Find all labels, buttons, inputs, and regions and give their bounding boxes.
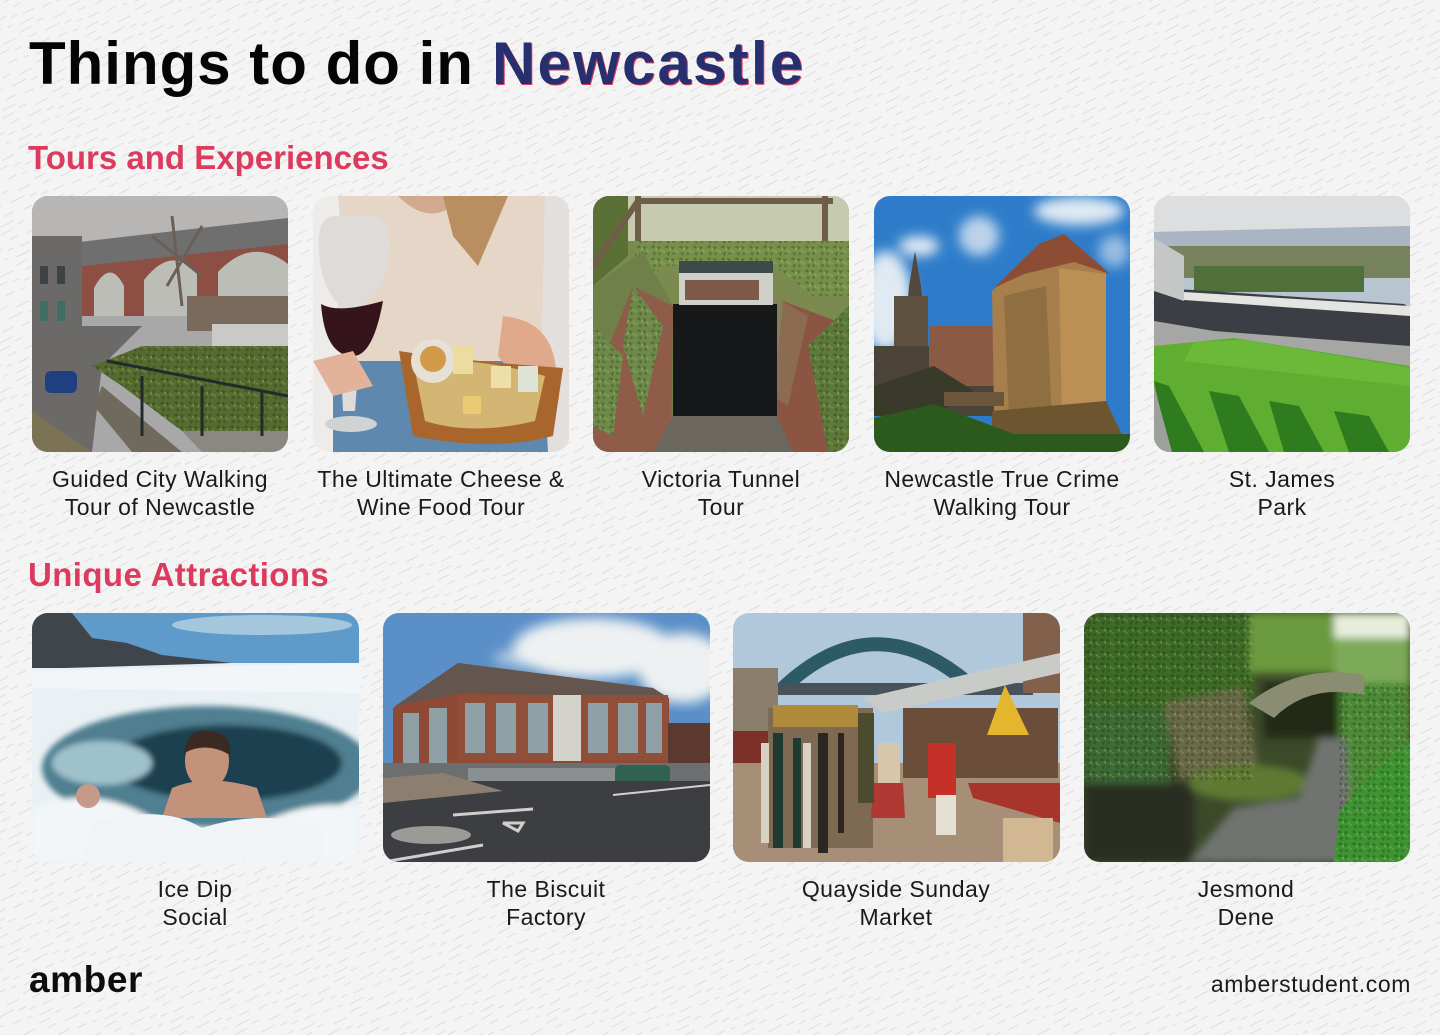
caption: Guided City Walking Tour: Tour of Newcastle bbox=[65, 494, 255, 520]
caption: Jesmond Dene: Dene bbox=[1218, 904, 1274, 930]
caption: Cheese and Wine Food Tour: The Ultimate Cheese & bbox=[317, 466, 565, 492]
caption: Quayside Sunday Market: Quayside Sunday bbox=[802, 876, 990, 902]
caption: Quayside Sunday Market: Market bbox=[860, 904, 932, 930]
photo: Ice Dip Social bbox=[32, 613, 359, 862]
title: Things to do in bbox=[29, 30, 474, 97]
caption: The Biscuit Factory: The Biscuit bbox=[487, 876, 605, 902]
caption: Jesmond Dene: Jesmond bbox=[1198, 876, 1294, 902]
caption: Cheese and Wine Food Tour: Wine Food Tour bbox=[357, 494, 525, 520]
caption: Victoria Tunnel Tour bbox=[642, 466, 800, 520]
caption: St. James Park bbox=[1229, 466, 1335, 520]
caption: St. James Park: Park bbox=[1257, 494, 1307, 520]
heading: Unique Attractions: Unique Attractions bbox=[28, 556, 329, 593]
caption: True Crime Walking Tour bbox=[884, 466, 1120, 520]
caption: Ice Dip Social: Ice Dip bbox=[158, 876, 232, 902]
photo: Jesmond Dene bbox=[1084, 613, 1410, 862]
caption: True Crime Walking Tour: Walking Tour bbox=[933, 494, 1071, 520]
photo: Cheese and Wine Food Tour bbox=[313, 196, 569, 452]
title bbox=[29, 30, 805, 97]
website url: amberstudent.com bbox=[1211, 971, 1411, 997]
caption: Victoria Tunnel Tour: Victoria Tunnel bbox=[642, 466, 800, 492]
photo: Victoria Tunnel bbox=[593, 196, 849, 452]
caption: Ice Dip Social: Social bbox=[162, 904, 228, 930]
caption: Ice Dip Social bbox=[158, 876, 232, 930]
photo: The Biscuit Factory bbox=[383, 613, 710, 862]
heading: Tours and Experiences: Tours and Experiences bbox=[28, 139, 389, 176]
photo: Guided City Walking Tour bbox=[32, 196, 288, 452]
title: Newcastle bbox=[492, 30, 805, 97]
logo: amber: amber bbox=[29, 959, 143, 1000]
caption: Quayside Sunday Market bbox=[802, 876, 990, 930]
caption: Jesmond Dene bbox=[1198, 876, 1294, 930]
photo: Quayside Sunday Market bbox=[733, 613, 1060, 862]
caption: The Biscuit Factory bbox=[487, 876, 605, 930]
caption: Guided City Walking Tour: Guided City Walking bbox=[52, 466, 268, 492]
photo: True Crime Walking Tour bbox=[874, 196, 1130, 452]
caption: Guided City Walking Tour bbox=[52, 466, 268, 520]
caption: Cheese and Wine Food Tour bbox=[317, 466, 565, 520]
caption: The Biscuit Factory: Factory bbox=[506, 904, 586, 930]
caption: Victoria Tunnel Tour: Tour bbox=[698, 494, 744, 520]
photo: St. James Park stadium bbox=[1154, 196, 1410, 452]
caption: St. James Park: St. James bbox=[1229, 466, 1335, 492]
caption: True Crime Walking Tour: Newcastle True Crime bbox=[884, 466, 1120, 492]
